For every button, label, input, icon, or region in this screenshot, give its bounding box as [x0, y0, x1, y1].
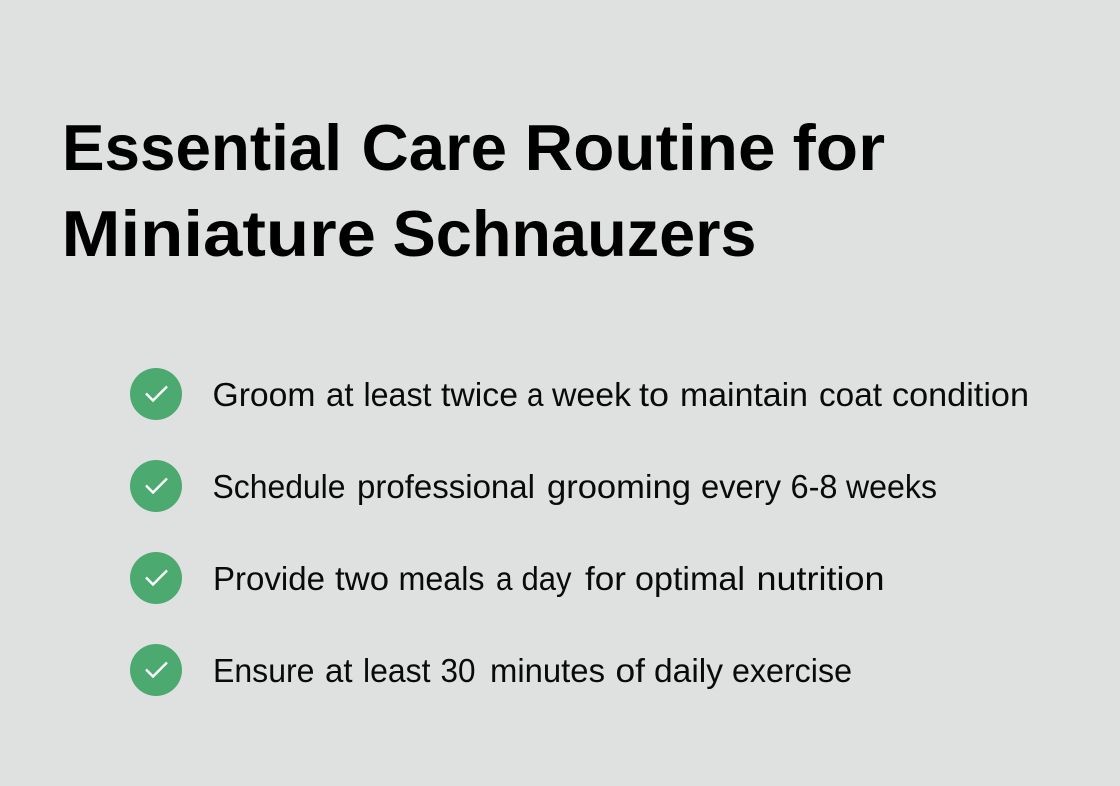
- item: meals: nutrition: [756, 560, 884, 597]
- title: [62, 111, 885, 270]
- title: Care: [362, 111, 507, 184]
- item: professional grooming: grooming: [547, 468, 691, 505]
- item: exercise: least: [363, 652, 430, 689]
- item: grooming at home: least: [364, 376, 432, 413]
- item: grooming at home: condition: [892, 376, 1029, 413]
- item: exercise: [130, 644, 852, 696]
- item: professional grooming: every: [701, 468, 781, 505]
- item: grooming at home: coat: [819, 376, 882, 413]
- item: exercise: exercise: [732, 652, 852, 689]
- item: meals: day: [522, 560, 572, 597]
- item: exercise: of: [616, 652, 646, 689]
- item: professional grooming: weeks: [845, 468, 937, 505]
- item: professional grooming: [130, 460, 937, 512]
- item: exercise: minutes: [490, 652, 605, 689]
- item: professional grooming: professional: [357, 468, 535, 505]
- item: grooming at home: [130, 368, 1029, 420]
- item: grooming at home: maintain: [680, 376, 808, 413]
- item: professional grooming: 6-8: [790, 468, 838, 505]
- item: grooming at home: twice: [441, 376, 518, 413]
- title: Essential: [62, 111, 342, 184]
- title: Miniature: [62, 197, 376, 270]
- checklist: [130, 368, 1029, 696]
- item: exercise: at: [325, 652, 352, 689]
- item: exercise: 30: [440, 652, 476, 689]
- title: Routine: [524, 111, 776, 184]
- item: grooming at home: to: [639, 376, 669, 413]
- item: meals: [130, 552, 884, 604]
- item: exercise: Ensure: [213, 652, 314, 689]
- item: grooming at home: a: [527, 376, 544, 413]
- item: grooming at home: week: [551, 376, 632, 413]
- item: professional grooming: Schedule: [212, 468, 346, 505]
- item: meals: a: [496, 560, 513, 597]
- item: grooming at home: at: [326, 376, 354, 413]
- title: for: [793, 111, 885, 184]
- item: exercise: daily: [654, 652, 724, 689]
- item: grooming at home: Groom: [212, 376, 316, 413]
- item: meals: for: [585, 560, 626, 597]
- title: Schnauzers: [392, 197, 756, 270]
- item: meals: meals: [398, 560, 484, 597]
- item: meals: optimal: [635, 560, 745, 597]
- item: meals: two: [335, 560, 389, 597]
- item: meals: Provide: [213, 560, 325, 597]
